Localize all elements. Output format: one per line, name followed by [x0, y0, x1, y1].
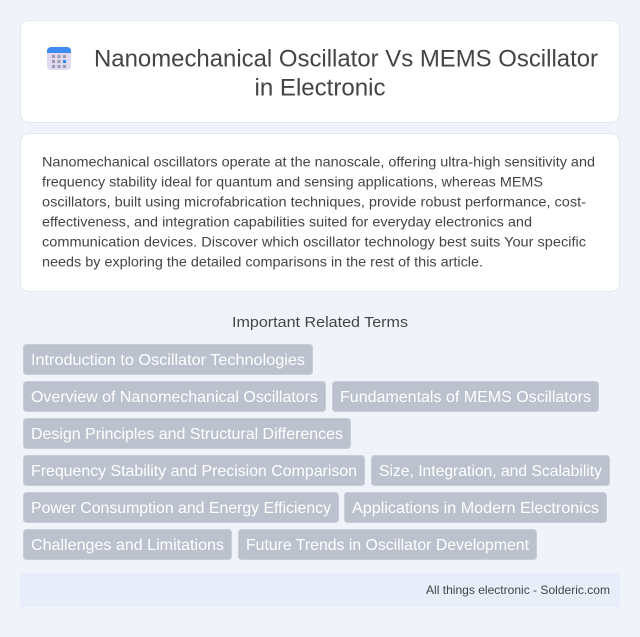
tag: applications	[344, 492, 606, 522]
tag: size	[372, 456, 610, 486]
title: in Electronic	[254, 74, 386, 102]
text block: description: frequency stability ideal for quantum and sensing applications, whereas MEMS	[42, 174, 543, 190]
text block: description: needs by exploring the detailed comparisons in the rest of this article.	[42, 254, 483, 270]
title: Nanomechanical Oscillator Vs MEMS Oscillator	[94, 46, 598, 72]
text block: description: effectiveness, and integration capabilities suited for everyday electronics and	[42, 214, 532, 230]
related term tags	[24, 344, 610, 560]
tag: frequency	[24, 456, 364, 486]
tag: frequency: Frequency Stability and Precision Comparison	[31, 463, 357, 480]
tag: overview	[24, 382, 326, 412]
tag: design	[24, 418, 350, 448]
icon: calendar grid	[47, 47, 71, 70]
tag: power: Power Consumption and Energy Efficiency	[31, 500, 331, 517]
text block: description: oscillators, built using microfabrication techniques, provide robust performance, cost-	[42, 194, 586, 210]
tag: introduction	[24, 344, 312, 374]
tag: challenges: Challenges and Limitations	[31, 537, 224, 554]
tag: applications: Applications in Modern Electronics	[352, 500, 599, 517]
footer	[20, 573, 620, 607]
tag: future trends: Future Trends in Oscillator Development	[246, 537, 530, 554]
tag: introduction: Introduction to Oscillator Technologies	[31, 352, 305, 369]
tag: future trends	[238, 530, 536, 560]
text block: description: Nanomechanical oscillators operate at the nanoscale, offering ultra-high sensitivity and	[42, 154, 595, 170]
tag: challenges	[24, 530, 232, 560]
tag: power	[24, 492, 338, 522]
panel: title header	[20, 20, 620, 122]
text block: description	[42, 154, 595, 270]
panel: description	[20, 134, 620, 292]
text block: description: communication devices. Discover which oscillator technology best suits Your specific	[42, 234, 586, 250]
heading: important related terms: Important Related Terms	[232, 315, 408, 331]
tag: design: Design Principles and Structural Differences	[31, 426, 343, 443]
tag: fundamentals: Fundamentals of MEMS Oscillators	[340, 389, 591, 406]
footer: All things electronic - Solderic.com	[426, 583, 610, 597]
title	[94, 46, 598, 102]
tag: overview: Overview of Nanomechanical Oscillators	[31, 389, 318, 406]
tag: size: Size, Integration, and Scalability	[379, 463, 602, 480]
tag: fundamentals	[332, 382, 598, 412]
